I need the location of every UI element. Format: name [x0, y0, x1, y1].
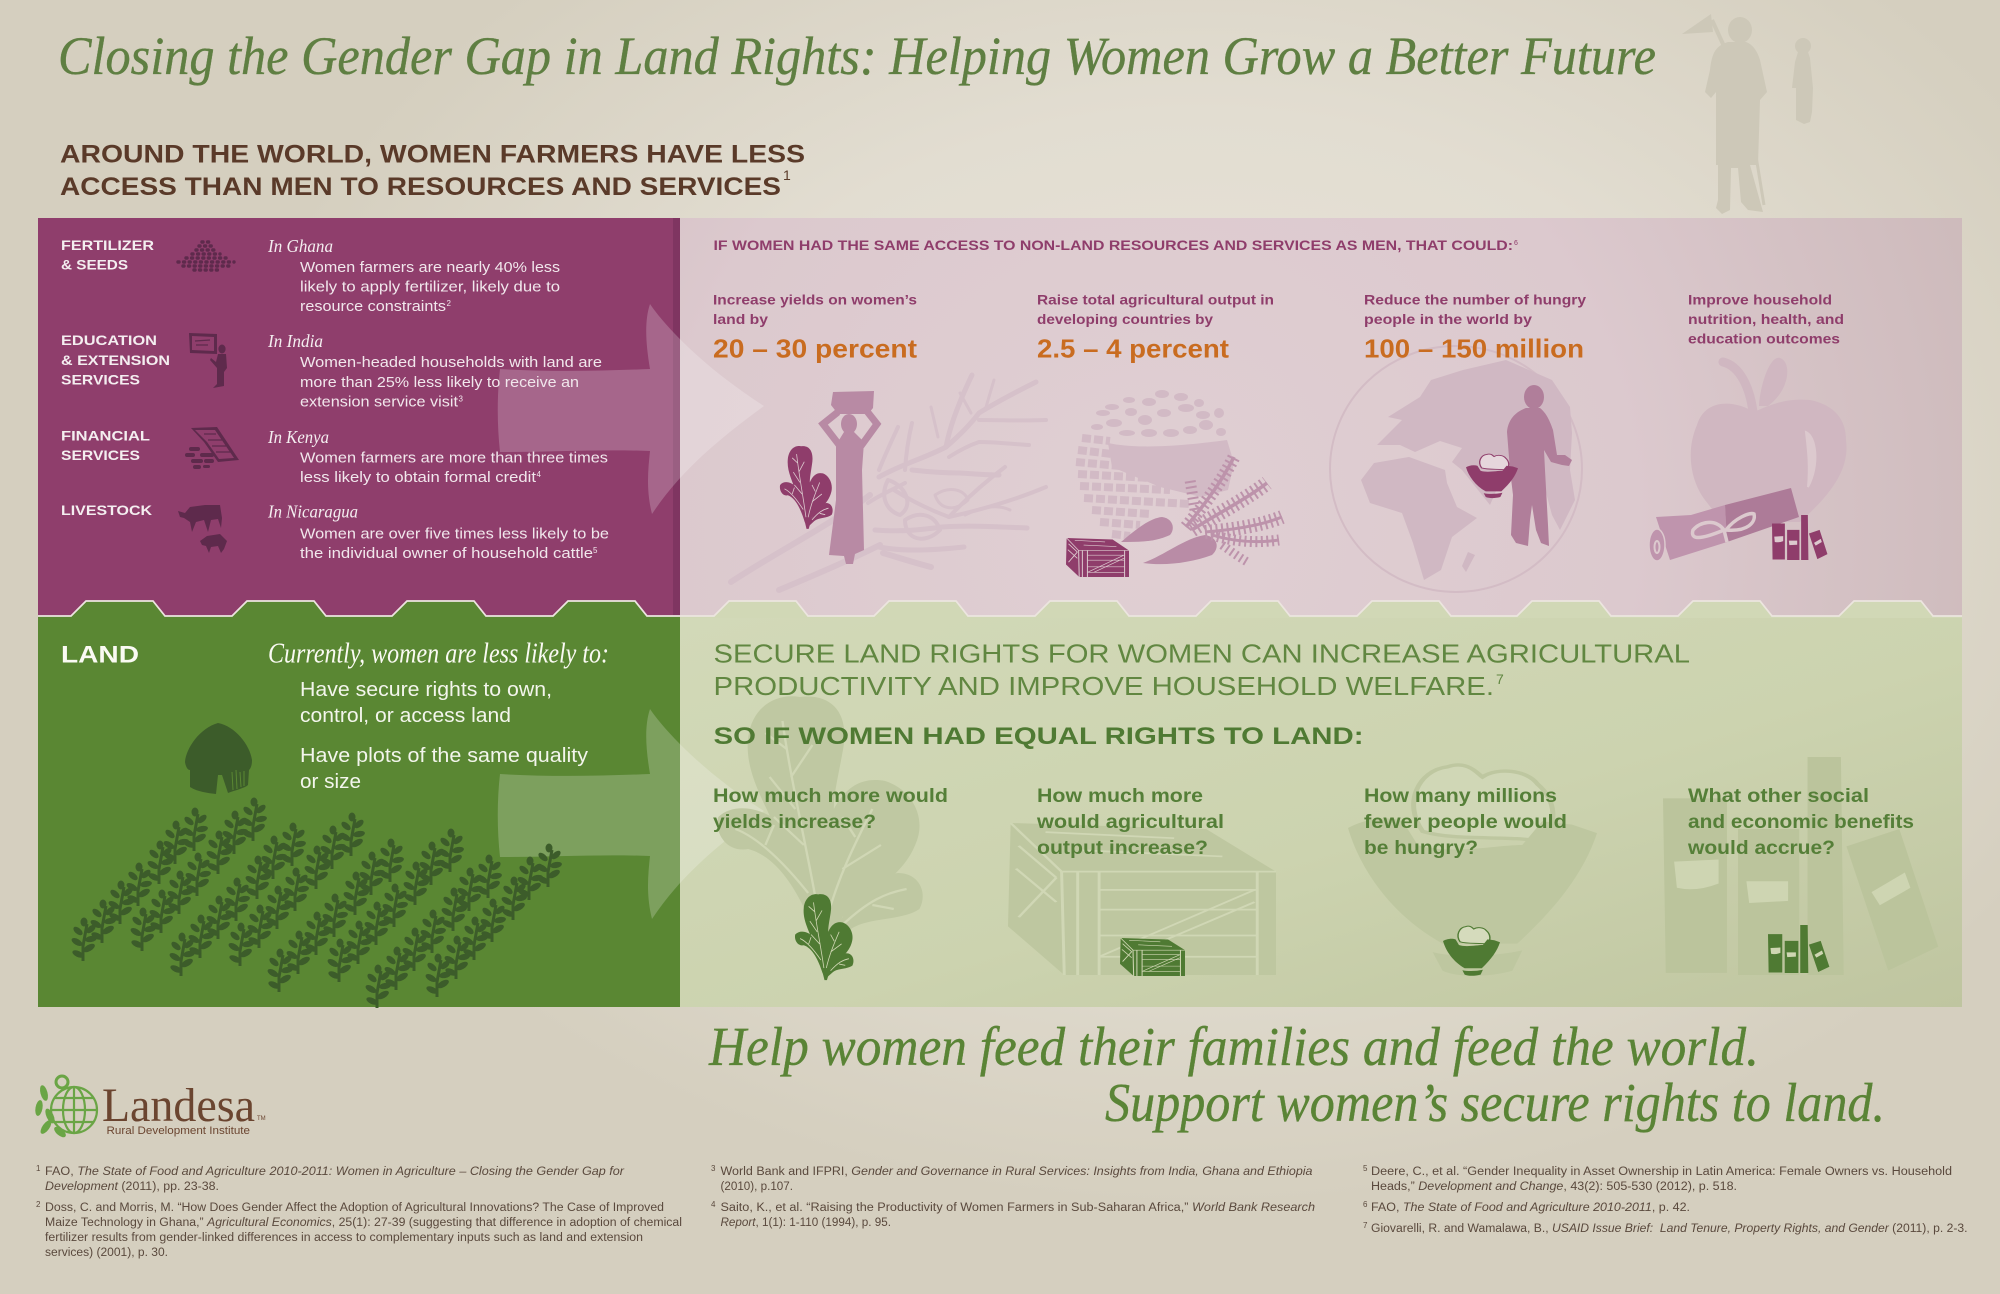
- text: question yields: How much more would: [713, 785, 948, 807]
- footnotes: first column: 1: [36, 1164, 41, 1173]
- text: non-land heading: 6: [1514, 240, 1518, 247]
- illustration: crop field: [70, 798, 562, 1008]
- illustration: ghost crate: [1008, 823, 1276, 975]
- text: Ghana: likely to apply fertilizer, likely due to: [300, 280, 560, 296]
- text: reduce hunger: [1364, 292, 1586, 364]
- text: Ghana: In Ghana: [267, 236, 333, 256]
- text: Kenya: In Kenya: [267, 427, 329, 447]
- text: question hunger: How many millions: [1364, 785, 1557, 807]
- text: currently less likely: [268, 638, 609, 793]
- footnotes: third column: [1363, 1164, 1968, 1235]
- icon: green leaf: [795, 894, 853, 980]
- panel: land benefits, right: [680, 616, 1962, 1007]
- text: non-land heading: IF WOMEN HAD THE SAME ACCESS TO NON-LAND RESOURCES AND SERVICES AS MEN, THAT COULD:: [714, 238, 1513, 253]
- text: currently less likely: control, or access land: [300, 705, 511, 727]
- text: Ghana: resource constraints: [300, 299, 446, 315]
- panel: non-land benefits, right: [680, 218, 1962, 616]
- text: reduce hunger: 100 – 150 million: [1364, 334, 1584, 364]
- footnotes: first column: FAO, The State of Food and Agriculture 2010-2011: Women in Agriculture – Closing the Gender Gap for: [45, 1166, 625, 1178]
- text: secure land rights statement: PRODUCTIVITY AND IMPROVE HOUSEHOLD WELFARE.: [714, 671, 1494, 701]
- icon: hut: [185, 723, 252, 794]
- text: currently less likely: Currently, women are less likely to:: [268, 638, 609, 670]
- text: Nicaragua: 5: [593, 546, 598, 555]
- text: question output: How much more: [1037, 785, 1203, 807]
- tagline: [708, 1016, 1885, 1133]
- text: currently less likely: or size: [300, 771, 361, 793]
- icon: livestock, cow and pig: [178, 505, 227, 553]
- text: non-land categories: EDUCATION: [61, 332, 157, 348]
- illustration: man holding bowl: [1507, 385, 1572, 546]
- footnotes: second column: Saito, K., et al. “Raising the Productivity of Women Farmers in Sub-Saharan Africa,” World Bank Research: [720, 1202, 1315, 1214]
- illustration: ghost apple: [1691, 358, 1847, 522]
- text: secure land rights statement: 7: [1496, 671, 1504, 687]
- text: equal rights heading: SO IF WOMEN HAD EQUAL RIGHTS TO LAND:: [714, 723, 1364, 750]
- text: India: 3: [458, 394, 464, 404]
- text: Kenya: Women farmers are more than three times: [300, 450, 608, 466]
- text: Nicaragua: Women are over five times less likely to be: [300, 526, 609, 542]
- text: non-land categories: & SEEDS: [61, 256, 128, 272]
- text: increase yields: land by: [713, 311, 768, 327]
- illustration: ghost tree: [731, 375, 1046, 590]
- text: India: extension service visit: [300, 394, 458, 410]
- text: non-land categories: [61, 237, 170, 518]
- footnotes: third column: 6: [1363, 1200, 1368, 1209]
- text: secure land rights statement: [714, 638, 1690, 701]
- text: Kenya: [267, 427, 608, 486]
- text: household outcomes: nutrition, health, and: [1688, 311, 1844, 327]
- text: question hunger: be hungry?: [1364, 837, 1478, 859]
- illustration: ghost grain pile: [1076, 390, 1234, 536]
- footnotes: first column: fertilizer results from gender-linked differences in access to complementary inputs such as land and extension: [45, 1232, 643, 1244]
- divider tabs between panels: [38, 601, 1962, 618]
- icon: education, teacher at board: [189, 333, 227, 388]
- heading: resources and services: 1: [783, 167, 791, 183]
- tagline: Support women’s secure rights to land.: [1105, 1072, 1885, 1133]
- text: raise output: Raise total agricultural output in: [1037, 292, 1274, 308]
- text: raise output: [1037, 292, 1274, 364]
- text: household outcomes: [1688, 292, 1844, 346]
- text: Ghana: [267, 236, 560, 315]
- text: household outcomes: Improve household: [1688, 292, 1832, 308]
- footnotes: third column: Giovarelli, R. and Wamalawa, B., USAID Issue Brief: Land Tenure, Property Rights, and Gender (2011), p. 2-3.: [1371, 1223, 1968, 1235]
- icon: purple food bowl: [1466, 454, 1518, 498]
- footnotes: first column: 2: [36, 1200, 41, 1209]
- text: question benefits: would accrue?: [1687, 837, 1835, 859]
- text: increase yields: [713, 292, 917, 364]
- text: reduce hunger: Reduce the number of hungry: [1364, 292, 1586, 308]
- logo: Landesa: Rural Development Institute: [106, 1125, 250, 1137]
- heading: resources and services: AROUND THE WORLD, WOMEN FARMERS HAVE LESS: [60, 140, 805, 168]
- text: question yields: yields increase?: [713, 811, 876, 833]
- text: Ghana: Women farmers are nearly 40% less: [300, 260, 560, 276]
- text: raise output: 2.5 – 4 percent: [1037, 334, 1229, 364]
- footnotes: second column: 4: [711, 1200, 716, 1209]
- footnotes: second column: 3: [711, 1164, 716, 1173]
- text: increase yields: Increase yields on women’s: [713, 292, 917, 308]
- text: non-land categories: SERVICES: [61, 372, 140, 388]
- text: India: [267, 331, 602, 410]
- footnotes: first column: services) (2001), p. 30.: [45, 1247, 168, 1259]
- text: India: more than 25% less likely to receive an: [300, 375, 579, 391]
- illustration: woman carrying basket: [823, 391, 877, 564]
- icon: fertilizer and seeds pile: [178, 242, 234, 270]
- icon: green crate: [1120, 938, 1185, 976]
- text: non-land categories: & EXTENSION: [61, 352, 170, 368]
- text: question output: output increase?: [1037, 837, 1208, 859]
- footnotes: third column: 5: [1363, 1164, 1368, 1173]
- text: non-land categories: LIVESTOCK: [61, 502, 152, 518]
- text: non-land categories: SERVICES: [61, 447, 140, 463]
- text: raise output: developing countries by: [1037, 311, 1213, 327]
- panel: non-land resources, left: [38, 218, 680, 616]
- text: question hunger: fewer people would: [1364, 811, 1567, 833]
- text: non-land categories: FINANCIAL: [61, 428, 151, 444]
- footnotes: first column: Doss, C. and Morris, M. “How Does Gender Affect the Adoption of Agricultural Innovations? The Case of Improved: [45, 1202, 664, 1214]
- logo: Landesa: [34, 1076, 266, 1139]
- arrow: lower: [498, 709, 764, 919]
- text: Nicaragua: [267, 502, 609, 562]
- text: reduce hunger: people in the world by: [1364, 311, 1532, 327]
- text: Kenya: less likely to obtain formal credit: [300, 470, 536, 486]
- icon: purple books: [1772, 515, 1827, 560]
- text: question benefits: [1687, 785, 1914, 859]
- illustration: ghost globe: [1330, 346, 1582, 592]
- footnotes: third column: FAO, The State of Food and Agriculture 2010-2011 , p. 42.: [1371, 1202, 1690, 1214]
- logo: Landesa: TM: [257, 1116, 266, 1122]
- heading: resources and services: ACCESS THAN MEN TO RESOURCES AND SERVICES: [60, 173, 781, 201]
- panel: land, left: [38, 616, 680, 1007]
- text: question hunger: [1364, 785, 1567, 859]
- text: India: In India: [267, 331, 323, 351]
- footnotes: second column: Report, 1(1): 1-110 (1994), p. 95.: [720, 1217, 891, 1229]
- text: non-land categories: FERTILIZER: [61, 237, 154, 253]
- text: Kenya: 4: [536, 470, 542, 479]
- text: currently less likely: Have plots of the same quality: [300, 745, 588, 767]
- illustration: farmer and child silhouettes: [1682, 14, 1813, 214]
- logo: Landesa: Landesa: [102, 1079, 255, 1132]
- icon: purple leaf: [780, 446, 833, 529]
- text: Ghana: 2: [446, 299, 452, 308]
- footnotes: first column: [36, 1164, 682, 1259]
- illustration: diploma: [1649, 488, 1799, 561]
- text: increase yields: 20 – 30 percent: [713, 334, 917, 364]
- text: currently less likely: Have secure rights to own,: [300, 679, 552, 701]
- text: question yields: [713, 785, 948, 833]
- footnotes: first column: Development (2011), pp. 23-38.: [45, 1181, 219, 1193]
- icon: financial services, ledger and coins: [185, 427, 239, 469]
- text: India: Women-headed households with land are: [300, 355, 602, 371]
- footnotes: second column: [711, 1164, 1315, 1229]
- arrow: upper: [498, 304, 764, 514]
- illustration: carrots: [1121, 457, 1282, 564]
- icon: purple crate: [1066, 538, 1129, 577]
- text: land label: LAND: [61, 642, 139, 668]
- footnotes: third column: Heads,” Development and Change , 43(2): 505-530 (2012), p. 518.: [1371, 1181, 1737, 1193]
- footnotes: second column: (2010), p.107.: [720, 1181, 793, 1193]
- title: Closing the Gender Gap in Land Rights: Helping Women Grow a Better Future: [58, 26, 1656, 86]
- illustration: ghost bowl: [1348, 765, 1597, 976]
- text: household outcomes: education outcomes: [1688, 330, 1840, 346]
- text: Nicaragua: In Nicaragua: [267, 502, 358, 522]
- footnotes: third column: Deere, C., et al. “Gender Inequality in Asset Ownership in Latin America: Female Owners vs. Household: [1371, 1166, 1952, 1178]
- text: question output: would agricultural: [1036, 811, 1224, 833]
- footnotes: third column: 7: [1363, 1221, 1368, 1230]
- icon: green books: [1768, 925, 1829, 973]
- icon: green food bowl: [1443, 926, 1500, 976]
- text: Nicaragua: the individual owner of household cattle: [300, 546, 593, 562]
- tagline: Help women feed their families and feed the world.: [708, 1016, 1759, 1077]
- text: question output: [1036, 785, 1224, 859]
- text: question benefits: What other social: [1688, 785, 1869, 807]
- footnotes: first column: Maize Technology in Ghana,” Agricultural Economics , 25(1): 27-39 (suggesting that difference in adoption of chemical: [45, 1217, 682, 1229]
- footnotes: second column: World Bank and IFPRI, Gender and Governance in Rural Services: Insights from India, Ghana and Ethiopia: [720, 1166, 1312, 1178]
- heading: resources and services: [60, 140, 805, 201]
- illustration: ghost leaf: [717, 696, 923, 953]
- text: secure land rights statement: SECURE LAND RIGHTS FOR WOMEN CAN INCREASE AGRICULTURAL: [714, 638, 1690, 668]
- text: question benefits: and economic benefits: [1688, 811, 1914, 833]
- illustration: ghost books: [1663, 757, 1938, 975]
